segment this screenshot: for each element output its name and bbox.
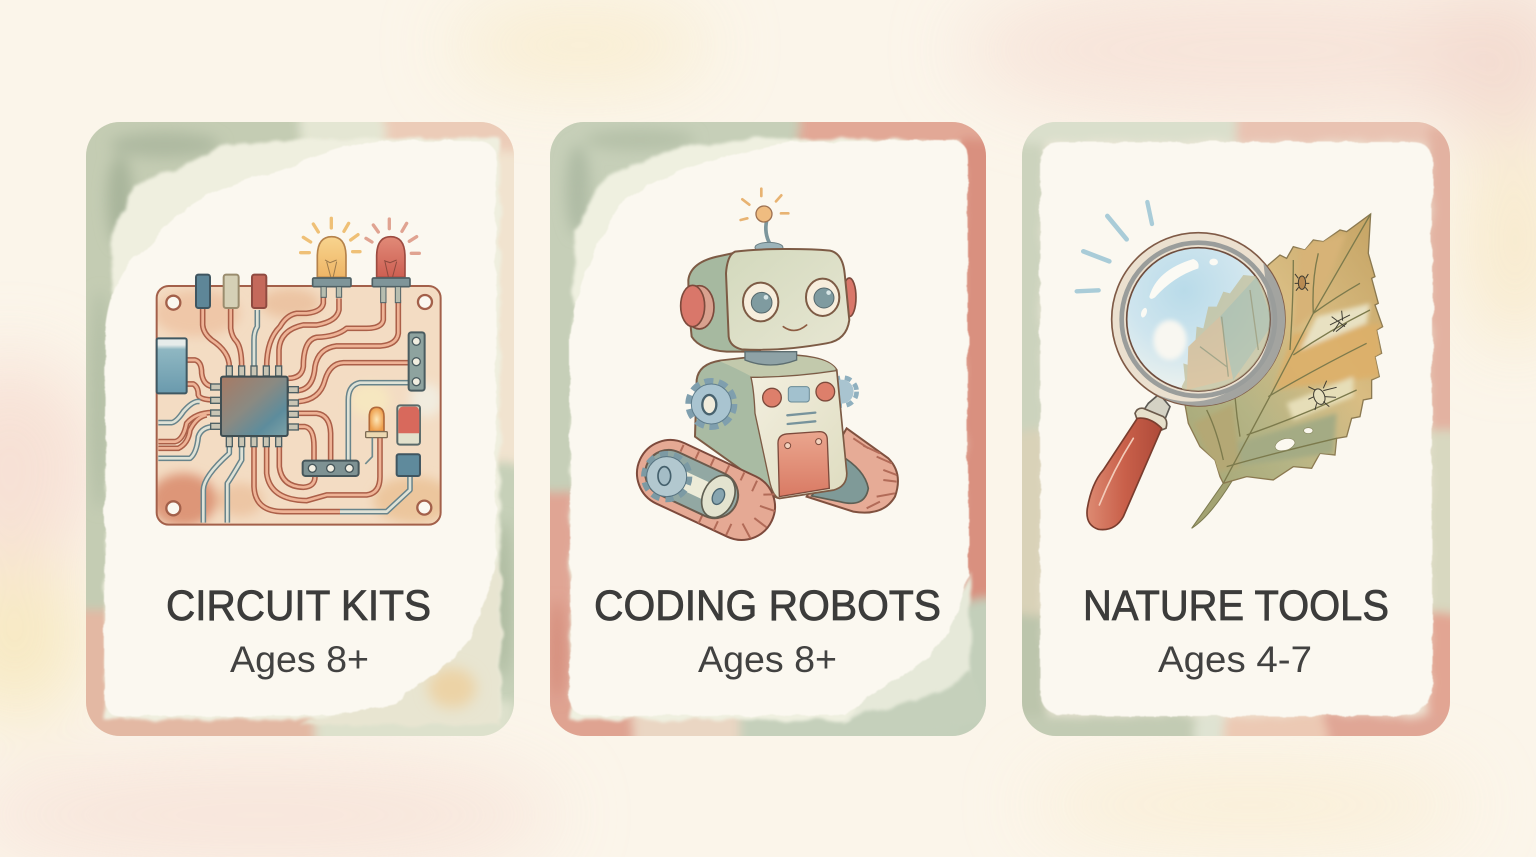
left gear: [689, 382, 733, 426]
pale wash layer: [104, 138, 500, 720]
neck: [745, 352, 797, 365]
board: [150, 286, 453, 527]
card: coding robots: [550, 122, 986, 736]
right track: [807, 428, 898, 513]
copper traces: [158, 295, 410, 523]
yellow LED: [301, 218, 360, 297]
card: nature tools: [1022, 122, 1450, 736]
subtitle: ages 8+: Ages 8+: [230, 639, 369, 680]
subtitle: ages 4-7: Ages 4-7: [1158, 639, 1312, 680]
icon: magnifier and leaf: [1077, 202, 1383, 530]
magnifier ring and lens: [1110, 232, 1286, 407]
track gear: [645, 455, 689, 499]
antenna: [741, 189, 788, 252]
red switch: [397, 405, 420, 445]
leaf: [1182, 214, 1383, 528]
card frame: circuit kits: [86, 122, 514, 736]
card frame: nature tools: [1022, 122, 1450, 736]
side connector: [409, 332, 425, 391]
top resistors: [196, 275, 266, 308]
microchip: [211, 366, 298, 447]
right ear: [843, 278, 856, 317]
bottom connector: [303, 461, 359, 476]
insects: [1295, 274, 1350, 410]
right gear: [829, 378, 857, 406]
title: circuit kits: CIRCUIT KITS: [166, 582, 431, 630]
sparkle lines: [1077, 202, 1152, 291]
blue block: [157, 338, 187, 393]
handle: [1087, 394, 1170, 530]
title: nature tools: NATURE TOOLS: [1083, 582, 1389, 630]
subtitle: ages 8+: Ages 8+: [698, 639, 837, 680]
card frame: coding robots: [550, 122, 986, 736]
paper: nature tools: [1040, 142, 1432, 716]
blue terminal: [397, 454, 420, 476]
left ear: [681, 285, 714, 329]
lower right wash: [300, 560, 500, 725]
body: [695, 355, 847, 498]
title: coding robots: CODING ROBOTS: [594, 582, 941, 630]
paper: circuit kits: [104, 141, 496, 716]
red LED: [366, 219, 419, 303]
head: [688, 249, 849, 352]
icon: robot: [626, 189, 898, 551]
lower right wash: [856, 572, 974, 714]
icon: circuit board: [150, 218, 453, 527]
small LED: [365, 407, 387, 464]
card: circuit kits: [86, 122, 514, 736]
mounting holes: [166, 295, 432, 515]
left track: [626, 429, 786, 551]
pale wash layer: [570, 140, 960, 720]
paper: coding robots: [570, 140, 968, 716]
